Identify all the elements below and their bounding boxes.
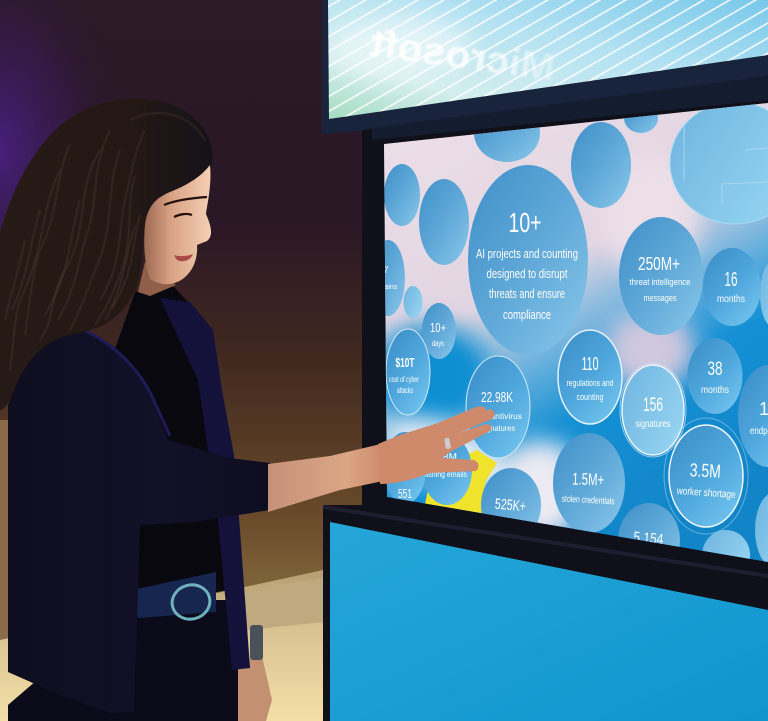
bubble: $10T: cost of cyber	[389, 375, 419, 384]
belt	[132, 572, 216, 623]
neck	[138, 262, 176, 296]
bubble: 1 endpoints	[738, 365, 768, 467]
bubble: 250M+: threat intelligence	[630, 277, 690, 288]
belt buckle	[168, 581, 214, 623]
bubble: 22.98K: signatures	[481, 423, 515, 433]
bubble: 156 signatures	[620, 363, 686, 457]
large bubble top right	[670, 102, 768, 224]
bubble: phishing emails	[424, 444, 472, 505]
bubble: 1.5M+ stolen credentials: stolen credentials	[561, 494, 615, 507]
bubble: 38 months	[688, 338, 742, 414]
bottom display frame	[323, 505, 768, 721]
middle display monitor	[362, 76, 768, 612]
jacket collar highlight	[78, 328, 170, 436]
bubble: $10T: $10T	[396, 355, 415, 370]
bubble: 110 regulations: regulations and	[566, 378, 614, 389]
bubble: 16 months	[703, 248, 761, 326]
bubble: $10T	[386, 329, 430, 415]
bubble: 5.154: 5.154	[633, 529, 664, 548]
hair highlights	[5, 113, 205, 370]
top display stripes and mirrored brand text: Microsoft	[367, 22, 558, 90]
bubble: 16 months: months	[717, 294, 745, 305]
screen light and colour washes	[370, 155, 700, 540]
bubble: 3.5M worker shortage: worker shortage	[676, 485, 736, 501]
jacket right panel	[160, 298, 250, 670]
bubble: 110 regulations: 110	[582, 354, 598, 374]
forearm	[268, 443, 398, 512]
bubble: 250M+: messages	[644, 293, 677, 304]
bubble: phishing emails: 8M	[443, 452, 457, 463]
bubble: 10+ days: days	[432, 339, 444, 348]
bubble: 525K+	[481, 468, 541, 523]
middle display frame	[362, 76, 768, 612]
bubble: 5.154	[618, 503, 680, 547]
bubble: 1.5M+ stolen credentials	[553, 433, 625, 533]
bubble: domains	[384, 240, 405, 316]
bubble: 16 months: 16	[724, 269, 738, 291]
bubble: 525K+: 525K+	[494, 496, 527, 515]
bubble: domains: 7	[383, 265, 389, 275]
bubble: 551: 551	[398, 486, 412, 501]
top display monitor	[320, 0, 768, 134]
screen content bubbles	[370, 102, 768, 580]
bubble: 156 signatures: signatures	[636, 419, 670, 430]
bubble: 22.98K: and antivirus	[474, 411, 522, 421]
bubble: 250M+	[619, 217, 703, 335]
lower hand and watch	[238, 625, 272, 721]
middle display screen	[384, 103, 768, 562]
mouth	[174, 254, 193, 261]
bubble: 38 months: 38	[708, 359, 722, 380]
bubble: 22.98K	[466, 356, 530, 458]
bubble: 38 months: months	[701, 385, 729, 396]
bubble: 156 signatures: 156	[643, 395, 663, 416]
bubble: 10+ AI projects	[468, 165, 588, 355]
bubble: 10+ AI projects: compliance	[503, 307, 551, 322]
bottom display monitor	[323, 505, 768, 721]
decorative blank bubbles	[384, 103, 768, 580]
bubble: 1.5M+ stolen credentials: 1.5M+	[572, 469, 605, 490]
top display stripes and mirrored brand text	[328, 0, 768, 117]
bubble: 110 regulations	[558, 330, 622, 424]
bubble: phishing emails: phishing emails	[419, 470, 467, 479]
bubble: 10+ AI projects: threats and ensure	[489, 286, 565, 301]
black turtleneck top	[90, 285, 228, 610]
bottom display screen	[330, 522, 768, 721]
bubble: 22.98K: 22.98K	[481, 389, 513, 406]
bubble: $10T: attacks	[397, 386, 413, 395]
bubble: 3.5M worker shortage	[664, 418, 748, 534]
jacket body and sleeve	[8, 328, 270, 713]
top display frame	[322, 0, 768, 134]
bubble: 10+ AI projects: 10+	[508, 207, 542, 238]
bubble: 10+ AI projects: designed to disrupt	[486, 266, 568, 281]
eye and eyebrow	[164, 197, 207, 217]
bubble: 250M+: 250M+	[638, 254, 680, 274]
bubble: 10+ AI projects: AI projects and counting	[476, 246, 578, 261]
bubble: 10+ days	[422, 303, 456, 359]
trousers	[8, 600, 238, 721]
hand touching the screen	[378, 406, 495, 484]
bubble: 551	[384, 432, 426, 504]
bubble: 10+ days: 10+	[430, 320, 446, 335]
bubble: 3.5M worker shortage: 3.5M	[689, 460, 721, 483]
woman	[0, 99, 495, 721]
hair	[0, 99, 212, 410]
bubble: domains: mains	[379, 284, 398, 291]
face	[144, 165, 211, 284]
top display screen	[328, 0, 768, 119]
bubble: 110 regulations: counting	[576, 392, 604, 403]
